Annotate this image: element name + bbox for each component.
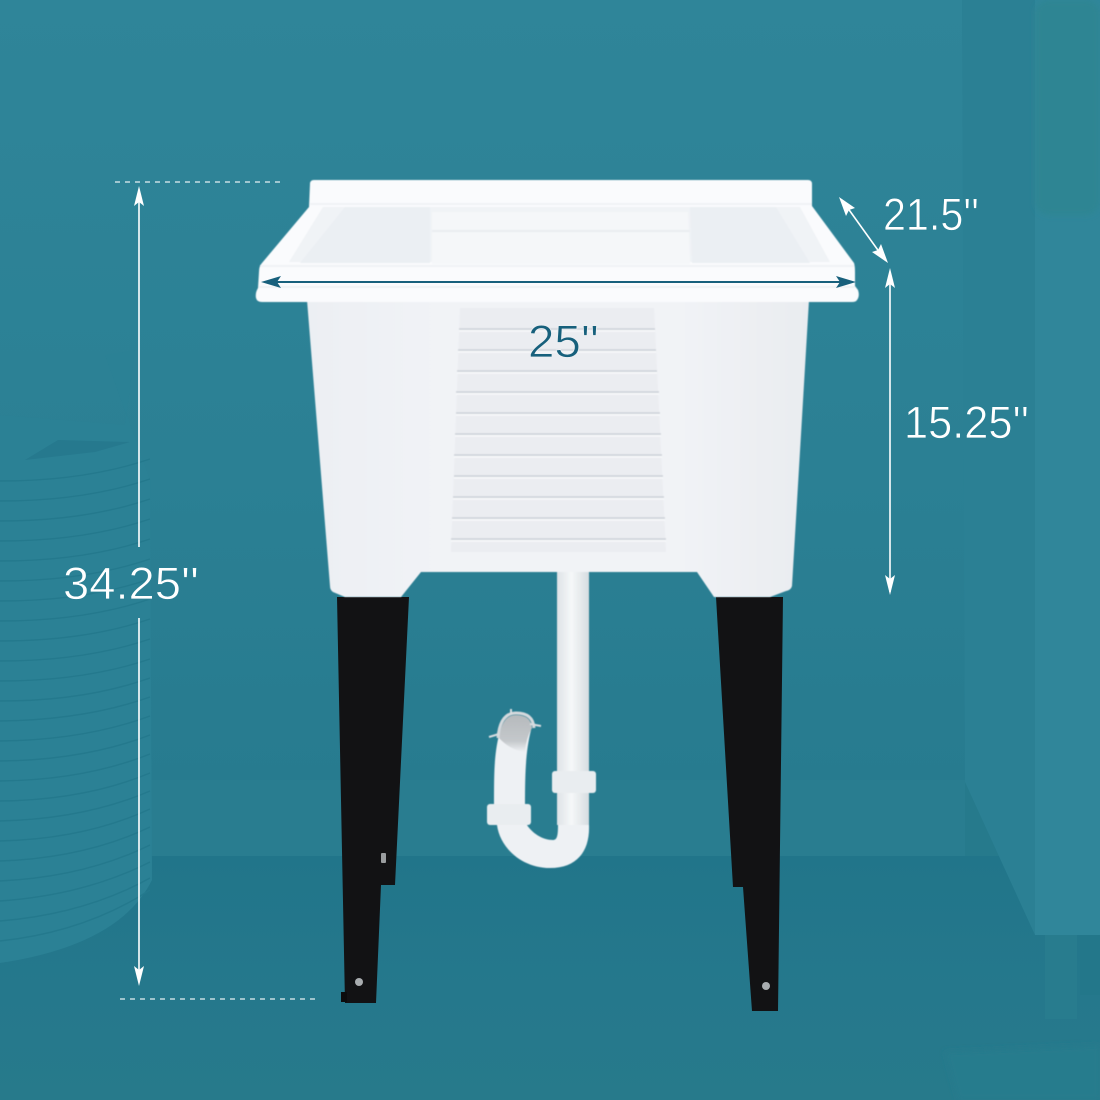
- dimension: depth 21.5: [839, 189, 979, 263]
- washboard ridges: [451, 308, 666, 552]
- drain pipe: [487, 570, 596, 868]
- dimension: overall height 34.25: [63, 182, 320, 999]
- dimension: overall height 34.25: 34.25'': [63, 558, 199, 609]
- dimension: depth 21.5: 21.5'': [883, 189, 979, 240]
- dimension: width 25: 25'': [528, 316, 599, 367]
- sink top rim and basin: [256, 180, 859, 302]
- sink tub body: [307, 300, 809, 597]
- sink legs: [337, 597, 783, 1011]
- dimension: tub height 15.25: [885, 268, 1029, 595]
- dimension: width 25: [261, 276, 856, 367]
- dimension: tub height 15.25: 15.25'': [904, 397, 1029, 448]
